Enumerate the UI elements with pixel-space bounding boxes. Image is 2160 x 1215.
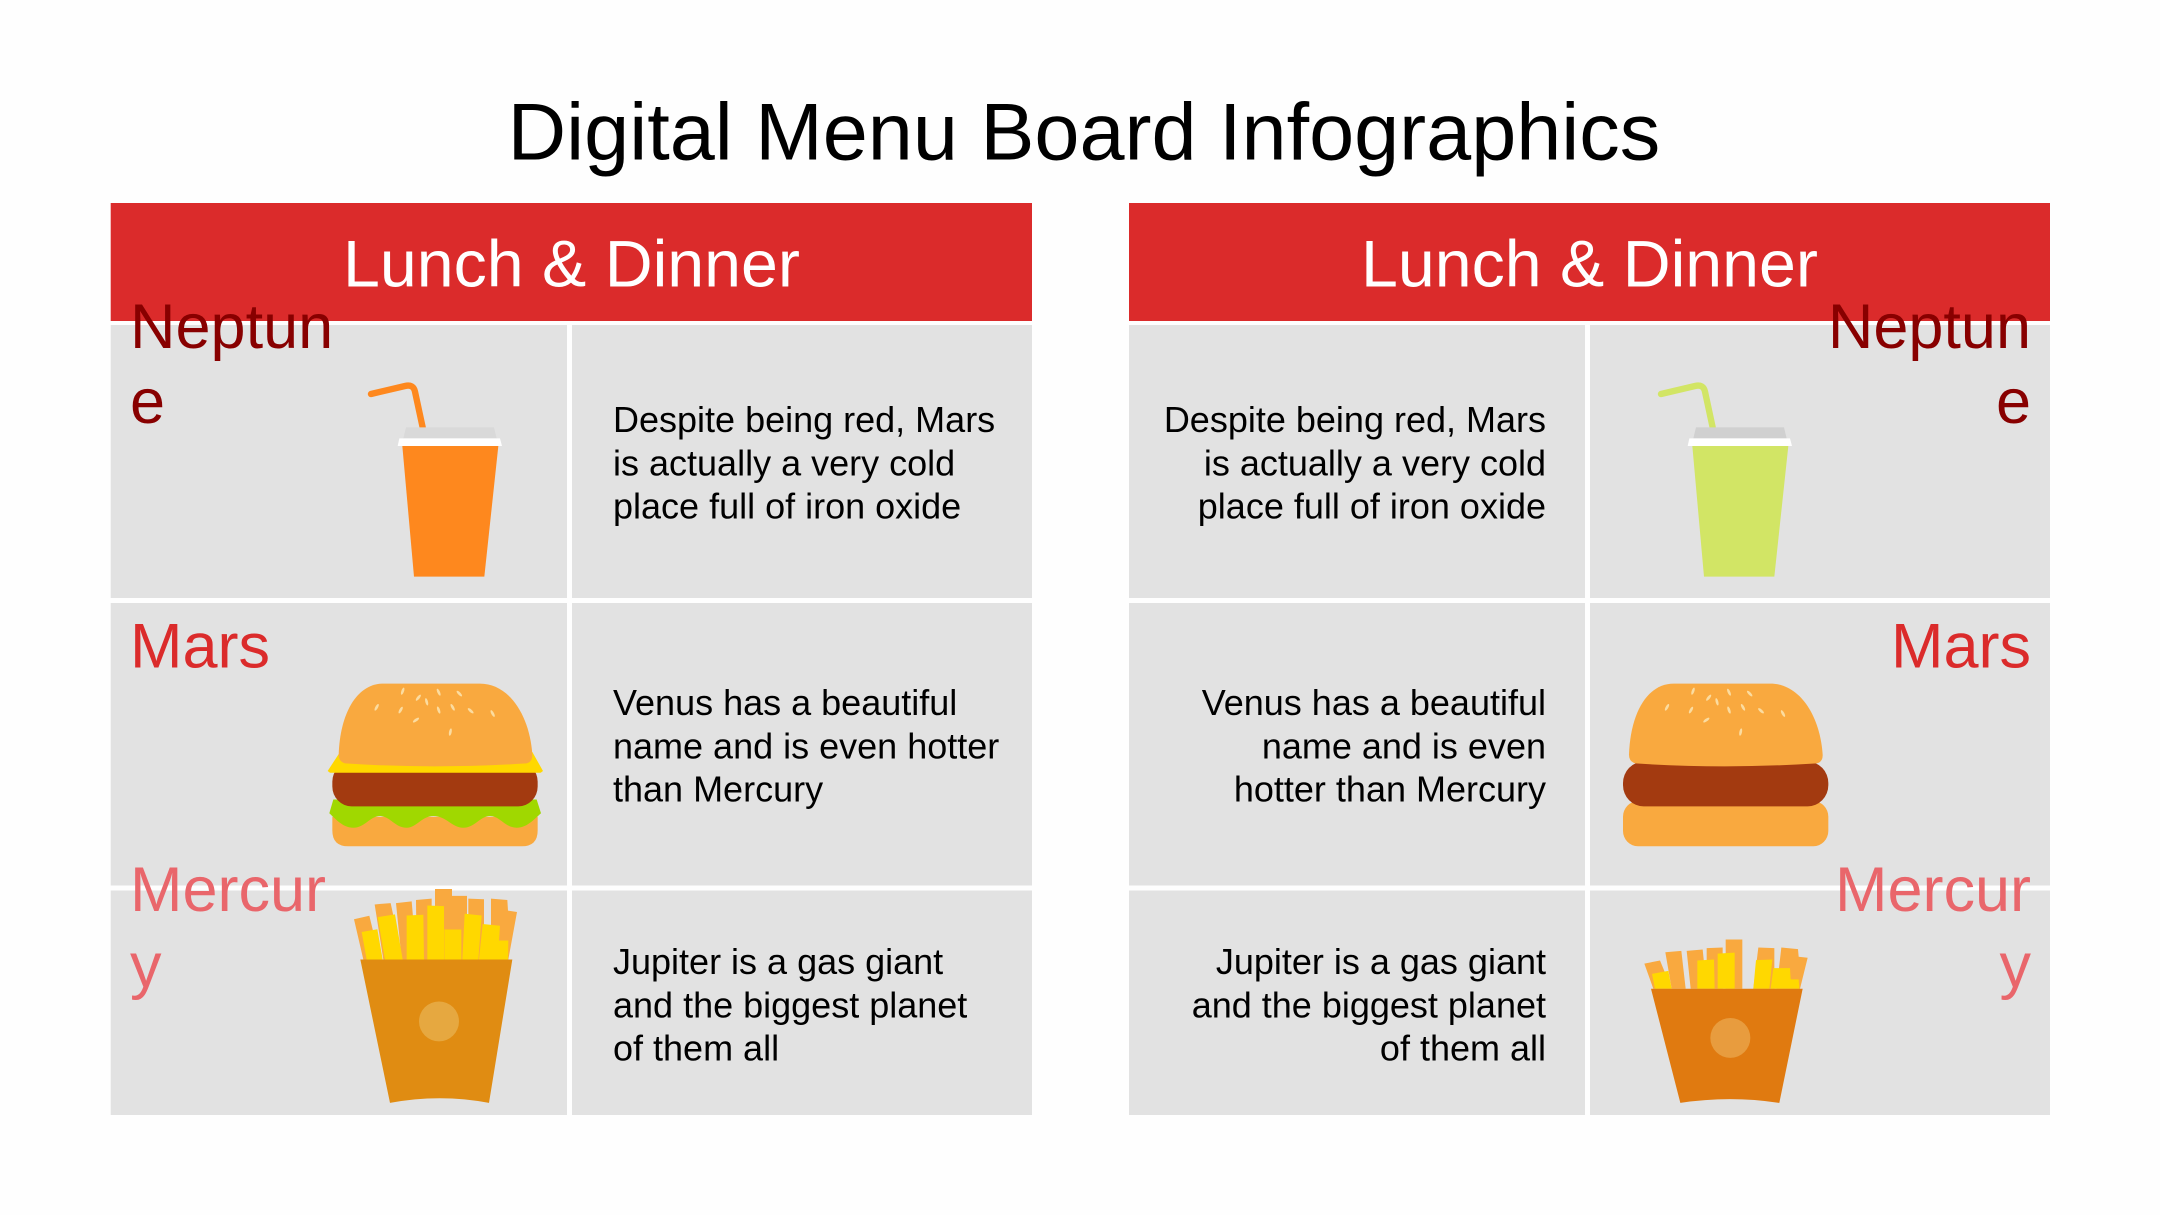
right description: Jupiter: and the biggest planet — [1192, 984, 1546, 1025]
right description: Mars: Despite being red, Mars — [1164, 399, 1546, 440]
icon: tall fries — [354, 889, 517, 1103]
left description: Mars: is actually a very cold — [613, 442, 955, 483]
right label: Mercury: Mercur — [1835, 855, 2031, 925]
left description: Jupiter: of them all — [613, 1028, 779, 1068]
icon: short fries — [1644, 940, 1808, 1103]
left label: Mercury: y — [130, 931, 162, 1001]
right row 3 cells — [1129, 890, 2050, 1115]
right label: Neptune: Neptun — [1828, 292, 2031, 362]
right description: Venus: Venus has a beautiful — [1202, 682, 1546, 723]
left description: Jupiter: and the biggest planet — [613, 984, 967, 1025]
left row 2 cells — [111, 603, 1032, 886]
right description: Mars: is actually a very cold — [1204, 442, 1546, 483]
left description: Venus: name and is even hotter — [613, 725, 999, 766]
panel: left menu — [111, 203, 1032, 1115]
left label: Mars: Mars — [130, 612, 270, 682]
right row 1 cells — [1129, 325, 2050, 598]
right description: Jupiter: Jupiter is a gas giant — [1216, 941, 1546, 982]
left panel header: Lunch & Dinner — [343, 228, 800, 302]
panel: right menu — [1129, 203, 2050, 1115]
left description: Jupiter: Jupiter is a gas giant — [613, 941, 943, 982]
icon: plain burger — [1623, 684, 1828, 846]
left label: Mercury: Mercur — [130, 855, 326, 925]
left label: Neptune: e — [130, 367, 165, 437]
left description: Venus: Venus has a beautiful — [613, 682, 957, 723]
left description: Mars: place full of iron oxide — [613, 486, 961, 526]
right row 2 cells — [1129, 603, 2050, 886]
left description: Venus: than Mercury — [613, 768, 823, 810]
icon: green drink — [1661, 386, 1792, 577]
right description: Mars: place full of iron oxide — [1198, 486, 1546, 526]
left description: Mars: Despite being red, Mars — [613, 399, 995, 440]
left row 1 cells — [111, 325, 1032, 598]
right description: Jupiter: of them all — [1380, 1028, 1546, 1068]
right label: Neptune: e — [1996, 367, 2031, 437]
title: Digital Menu Board Infographics — [508, 88, 1660, 178]
icon: burger with cheese and lettuce — [328, 684, 543, 846]
left row 3 cells — [111, 890, 1032, 1115]
left label: Neptune: Neptun — [130, 292, 333, 362]
right label: Mars: Mars — [1891, 612, 2031, 682]
right description: Venus: name and is even — [1262, 725, 1546, 766]
icon: orange drink — [371, 386, 502, 577]
left panel header — [111, 203, 1032, 321]
right label: Mercury: y — [2000, 931, 2032, 1001]
right panel header: Lunch & Dinner — [1361, 228, 1818, 302]
right panel header — [1129, 203, 2050, 321]
right description: Venus: hotter than Mercury — [1234, 768, 1546, 810]
